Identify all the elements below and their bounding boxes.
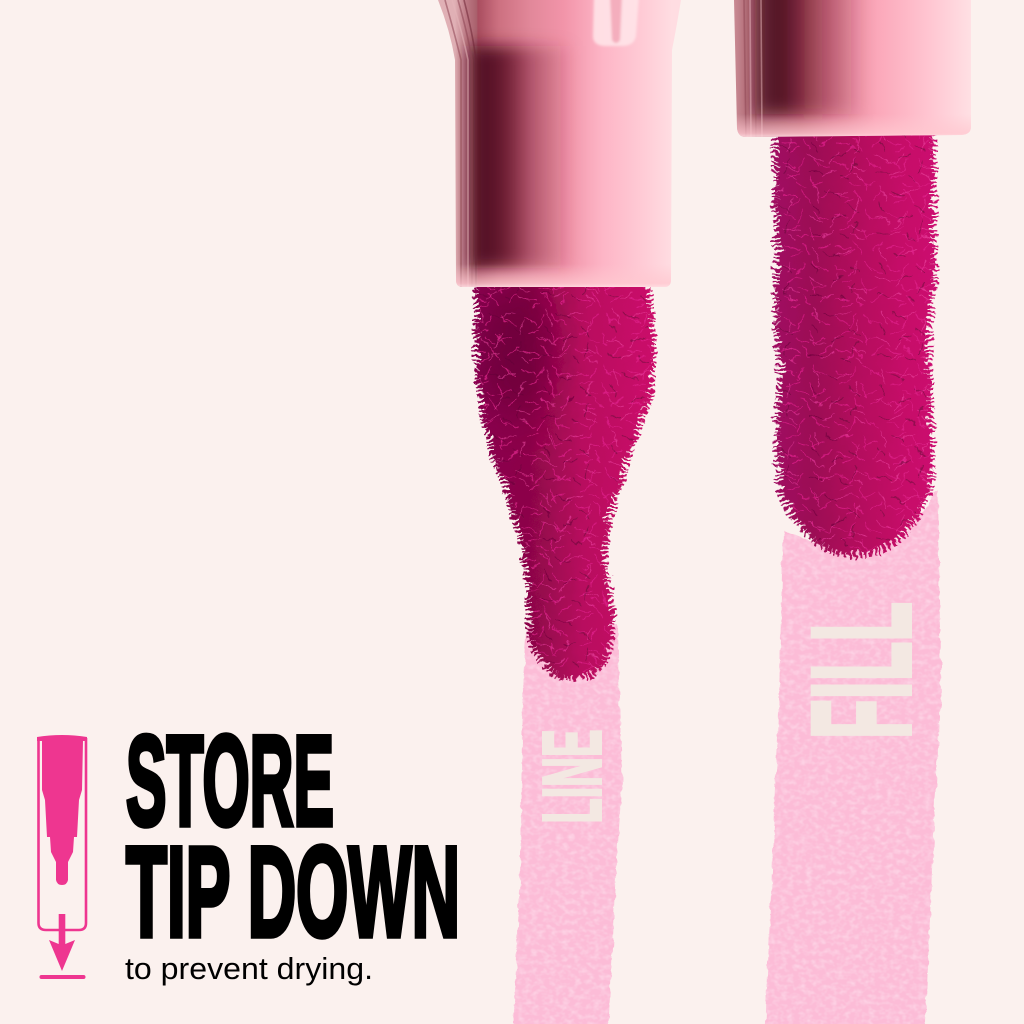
cap: line marker xyxy=(430,0,690,290)
heading: STORE xyxy=(126,710,334,853)
icon: baseline xyxy=(40,975,86,979)
icon: down arrow xyxy=(49,914,75,971)
shadow band xyxy=(470,46,575,268)
shadow band xyxy=(755,0,865,114)
heading: TIP DOWN xyxy=(126,821,460,964)
heading xyxy=(126,710,460,964)
swatch: line xyxy=(513,625,622,1024)
icon: store tip down xyxy=(37,735,87,979)
swatch: fill: FILL xyxy=(782,602,940,739)
cap: fill marker xyxy=(730,0,975,140)
highlight xyxy=(593,0,639,46)
brush: fill tip xyxy=(779,130,930,551)
swatch: fill xyxy=(765,490,941,1024)
icon: marker silhouette xyxy=(37,735,87,885)
swatch: line: LINE xyxy=(526,730,618,824)
icon: tube outline xyxy=(38,738,86,930)
brush: line tip xyxy=(477,280,650,676)
subheading: to prevent drying. xyxy=(125,952,373,986)
